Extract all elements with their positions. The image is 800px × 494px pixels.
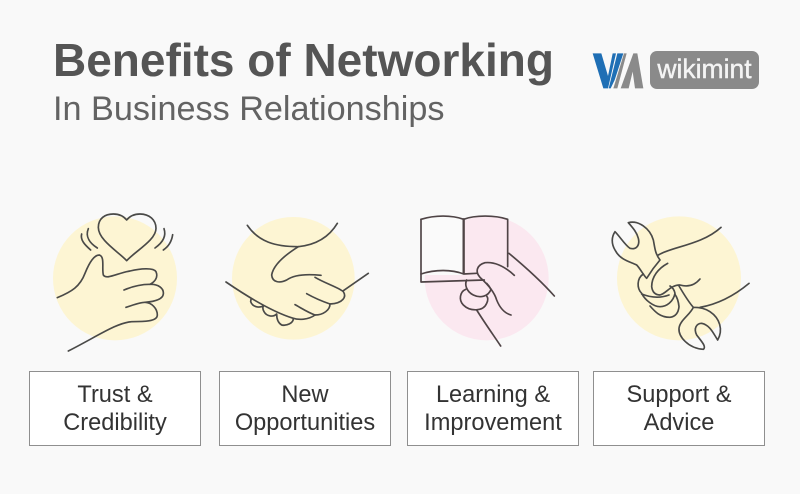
- label box: Trust & Credibility: Credibility: [63, 410, 167, 436]
- logo: wikimint badge: [650, 51, 759, 89]
- label box: Trust & Credibility: Trust &: [77, 382, 153, 408]
- label box: New Opportunities: Opportunities: [235, 410, 375, 436]
- logo: wikimint badge: wikimint: [657, 54, 752, 84]
- logo: VIA mark: [592, 53, 644, 88]
- label box: Trust & Credibility: [29, 371, 201, 446]
- label box: New Opportunities: New: [281, 382, 329, 408]
- icon: trust heart and hand: [53, 213, 177, 352]
- title: Benefits of Networking: [53, 34, 554, 86]
- label box: Learning & Improvement: [407, 371, 579, 446]
- label box: New Opportunities: [219, 371, 391, 446]
- subtitle: In Business Relationships: [53, 90, 444, 128]
- label box: Support & Advice: Advice: [644, 410, 714, 436]
- label box: Learning & Improvement: Improvement: [424, 410, 562, 436]
- label box: Support & Advice: Support &: [627, 382, 731, 408]
- label box: Learning & Improvement: Learning &: [436, 382, 550, 408]
- icon: open book in hand: [420, 215, 556, 347]
- icon: wrench in hand: [611, 216, 750, 350]
- label box: Support & Advice: [593, 371, 765, 446]
- icon: handshake: [225, 217, 370, 340]
